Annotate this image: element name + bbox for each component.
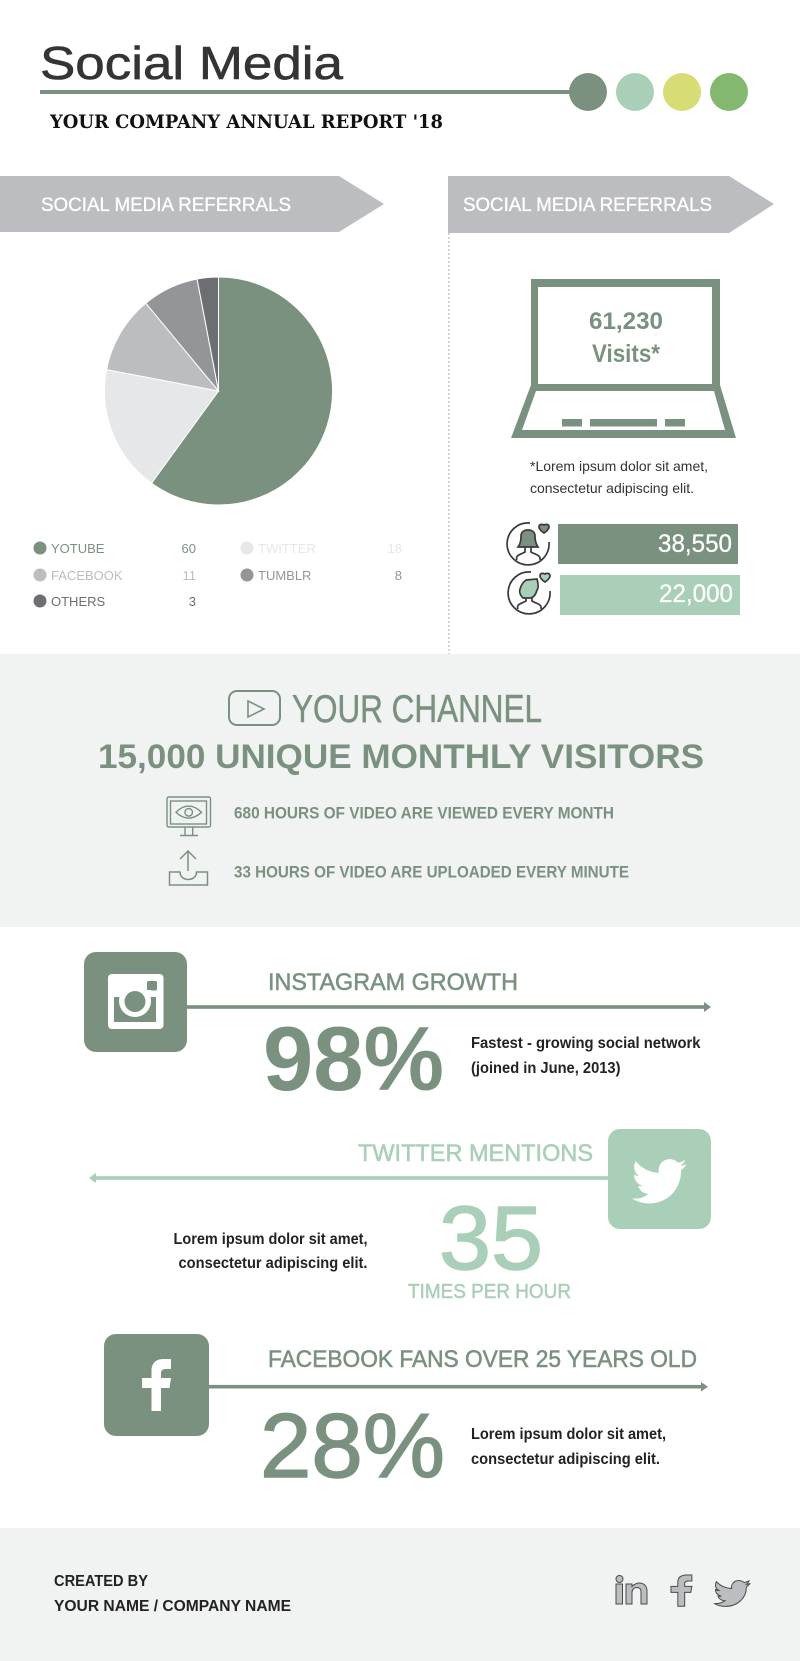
footer xyxy=(0,1528,800,1661)
icon: facebook small xyxy=(671,1575,692,1606)
icon: laptop xyxy=(511,279,736,438)
legend: 3 xyxy=(189,594,196,609)
panel: instagram xyxy=(84,952,711,1110)
description: consectetur adipiscing elit. xyxy=(178,1255,368,1272)
bar: women xyxy=(558,524,738,564)
legend: 60 xyxy=(182,541,196,556)
arrow xyxy=(89,1173,608,1183)
credit: YOUR NAME / COMPANY NAME xyxy=(54,1598,291,1615)
arrow xyxy=(208,1382,708,1392)
heading: visitors: 15,000 UNIQUE MONTHLY VISITORS xyxy=(98,738,704,776)
heading: FACEBOOK FANS OVER 25 YEARS OLD xyxy=(268,1346,697,1373)
description xyxy=(174,1231,368,1272)
banner: right xyxy=(448,176,774,233)
legend: YOTUBE xyxy=(51,541,105,556)
title: Social Media xyxy=(40,37,343,89)
icon: man xyxy=(508,572,550,614)
figure: 98% xyxy=(263,1009,444,1110)
banner: left: SOCIAL MEDIA REFERRALS xyxy=(41,194,291,216)
subtitle: YOUR COMPANY ANNUAL REPORT '18 xyxy=(49,111,443,133)
icon: twitter small xyxy=(714,1580,750,1606)
legend: TWITTER xyxy=(258,541,316,556)
icon: monitor xyxy=(167,797,210,836)
description: consectetur adipiscing elit. xyxy=(471,1451,660,1468)
bar: men xyxy=(560,575,740,615)
figure: 28% xyxy=(260,1396,445,1497)
description xyxy=(471,1035,701,1077)
banner: left xyxy=(0,176,384,232)
panel: referrals pie xyxy=(0,176,402,609)
colour dots xyxy=(569,73,748,111)
figure: 35 xyxy=(439,1189,543,1289)
description xyxy=(471,1426,666,1468)
icon: upload xyxy=(170,851,208,885)
legend xyxy=(34,541,402,609)
panel: visits xyxy=(448,176,774,615)
icon: woman xyxy=(507,523,549,565)
visits figure: 61,230 xyxy=(589,308,663,335)
description: Fastest - growing social network xyxy=(471,1035,701,1052)
stat: hours viewed: 680 HOURS OF VIDEO ARE VIEWED EVERY MONTH xyxy=(234,804,614,822)
legend: 18 xyxy=(388,541,402,556)
legend: FACEBOOK xyxy=(51,568,123,583)
description: (joined in June, 2013) xyxy=(471,1060,620,1077)
bar: women: 38,550 xyxy=(658,530,732,558)
description: Lorem ipsum dolor sit amet, xyxy=(471,1426,666,1443)
legend: 11 xyxy=(182,568,196,583)
arrow xyxy=(186,1002,711,1012)
footnote: consectetur adipiscing elit. xyxy=(530,480,694,496)
heading: your channel: YOUR CHANNEL xyxy=(292,688,542,731)
panel: your channel xyxy=(0,654,800,927)
footnote xyxy=(530,458,708,496)
icon: linkedin xyxy=(616,1576,647,1604)
panel: twitter xyxy=(89,1129,711,1303)
bar: men: 22,000 xyxy=(659,580,733,608)
visits figure xyxy=(589,308,663,368)
heading: TWITTER MENTIONS xyxy=(358,1140,593,1167)
header rule xyxy=(40,90,580,94)
icon: facebook xyxy=(104,1334,209,1436)
legend: OTHERS xyxy=(51,594,106,609)
visits figure: Visits* xyxy=(592,340,660,368)
banner: right: SOCIAL MEDIA REFERRALS xyxy=(463,194,712,216)
header xyxy=(40,37,748,133)
heading: INSTAGRAM GROWTH xyxy=(268,969,518,996)
icon: play xyxy=(229,691,280,725)
icon: instagram xyxy=(84,952,187,1052)
icon: twitter xyxy=(608,1129,711,1229)
credit xyxy=(54,1573,291,1615)
credit: CREATED BY xyxy=(54,1573,149,1590)
footnote: *Lorem ipsum dolor sit amet, xyxy=(530,458,708,474)
unit: TIMES PER HOUR xyxy=(408,1281,571,1303)
pie chart xyxy=(104,277,333,505)
description: Lorem ipsum dolor sit amet, xyxy=(174,1231,368,1248)
stat: hours uploaded: 33 HOURS OF VIDEO ARE UPLOADED EVERY MINUTE xyxy=(234,864,629,882)
legend: 8 xyxy=(395,568,402,583)
panel: facebook xyxy=(104,1334,708,1497)
legend: TUMBLR xyxy=(258,568,311,583)
